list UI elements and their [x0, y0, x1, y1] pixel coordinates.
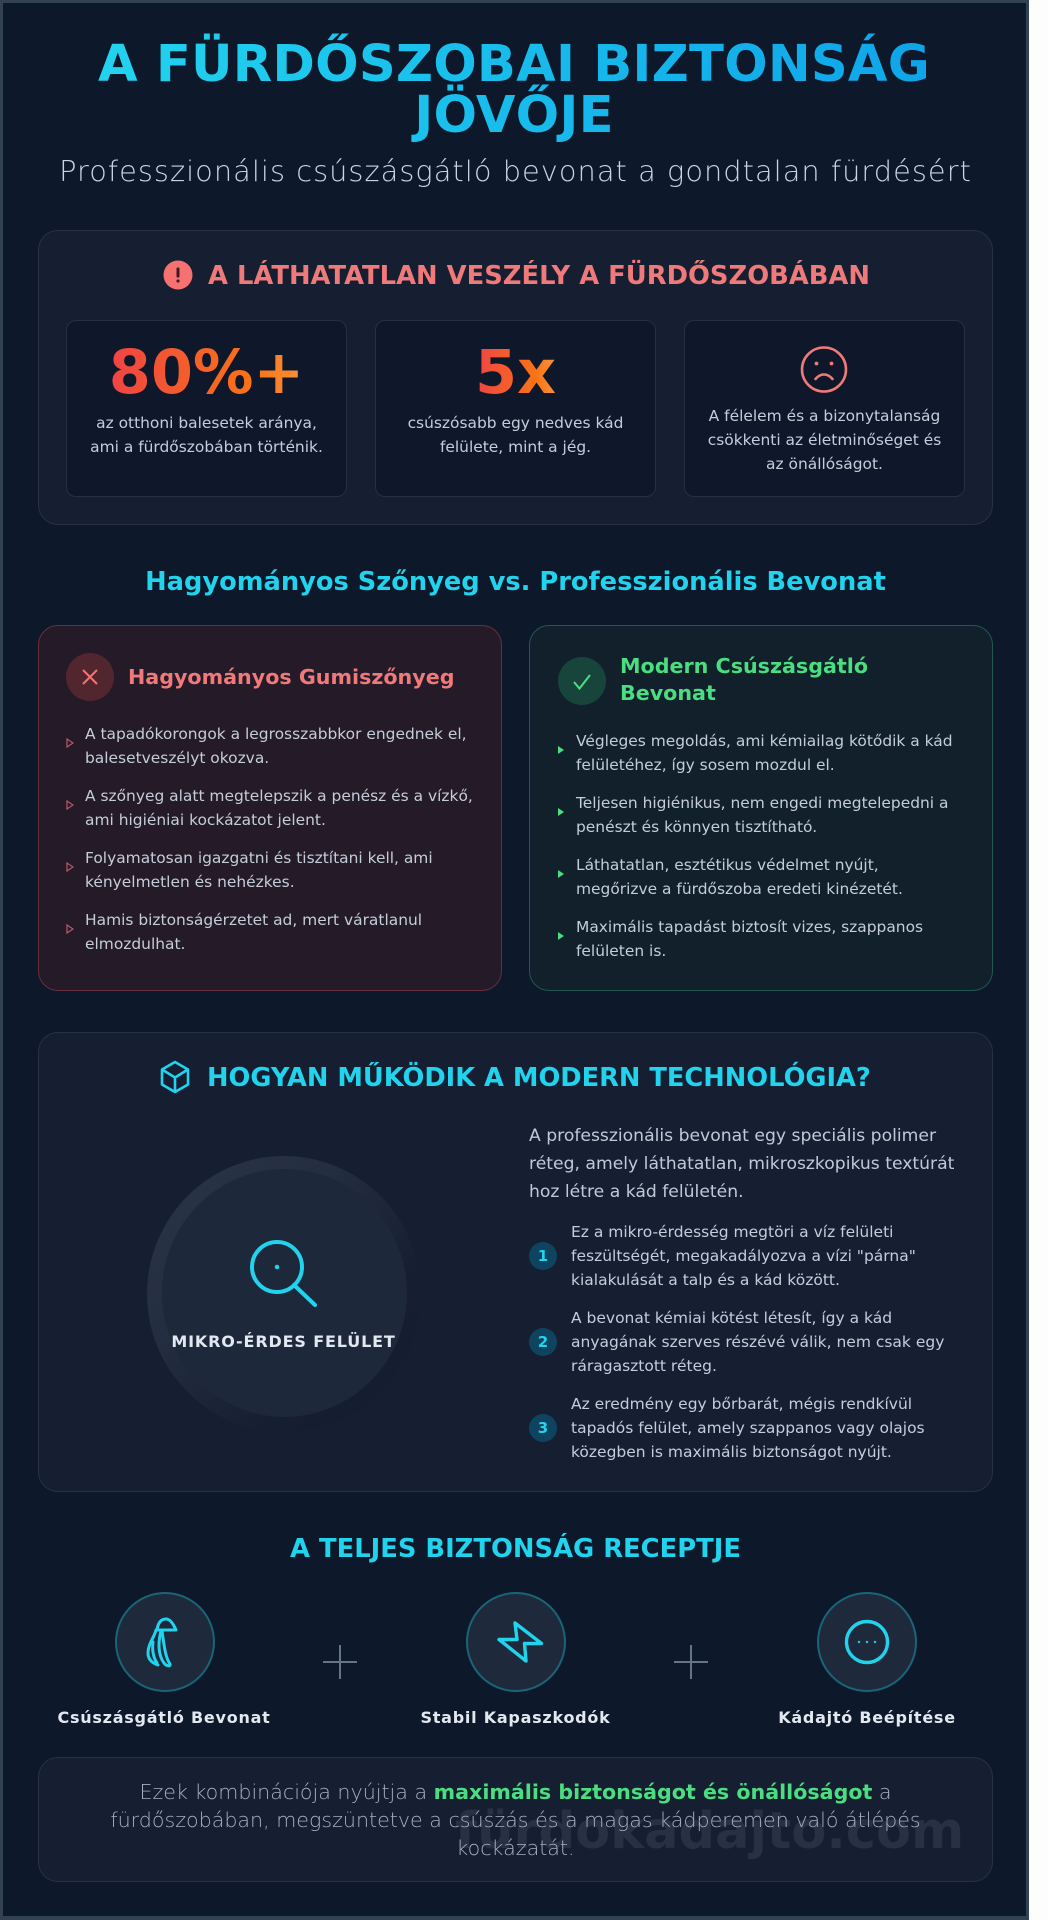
step 2 number: 2: [538, 1333, 548, 1351]
stat 1 text: az otthoni balesetek aránya,: [96, 414, 317, 432]
step 3 number: [529, 1414, 557, 1442]
step 2 text: [571, 1309, 944, 1375]
item 1: Végleges megoldás, ami kémiailag kötődik a kád: [576, 732, 953, 750]
stat 80%: 80%+: [109, 338, 304, 408]
item 4: felületen is.: [576, 942, 666, 960]
watermark: fürdokadajto.com: [455, 1802, 964, 1861]
stat 2 text: felülete, mint a jég.: [440, 438, 591, 456]
title: JÖVŐJE: [414, 85, 614, 145]
icon: circle with dots: [840, 1615, 894, 1669]
intro text: A professzionális bevonat egy speciális polimer: [529, 1126, 936, 1146]
heading: modern coating: [620, 654, 868, 705]
item 2: ami higiéniai kockázatot jelent.: [85, 811, 326, 829]
heading: modern coating: Modern Csúszásgátló: [620, 654, 868, 678]
list: traditional mat: [66, 725, 473, 953]
item 3: megőrizve a fürdőszoba eredeti kinézetét.: [576, 880, 903, 898]
icon: plus: [674, 1645, 708, 1679]
recipe item 2 circle: [466, 1592, 566, 1692]
step 2 number: [529, 1328, 557, 1356]
item 4: [576, 918, 923, 960]
panel: traditional mat: [38, 625, 502, 991]
recipe item 3 circle: [817, 1592, 917, 1692]
bullet 2: [66, 800, 74, 810]
bullet 4: [558, 932, 564, 940]
item 2: [85, 787, 473, 829]
stat 2 text: csúszósabb egy nedves kád: [408, 414, 623, 432]
item 4: Hamis biztonságérzetet ad, mert váratlanul: [85, 911, 422, 929]
step 3 text: közegben is maximális biztonságot nyújt.: [571, 1443, 892, 1461]
bullet 2: [558, 808, 564, 816]
title: [98, 34, 930, 145]
outer ring: [147, 1156, 421, 1432]
conclusion text: Ezek kombinációja nyújtja a maximális biztonságot és önállóságot a: [139, 1780, 892, 1804]
item 2: [576, 794, 948, 836]
step 2 text: anyagának szerves részévé válik, nem csak egy: [571, 1333, 944, 1351]
item 2: A szőnyeg alatt megtelepszik a penész és a vízkő,: [85, 787, 473, 805]
label: tub door: Kádajtó Beépítése: [778, 1708, 956, 1727]
item 3: [576, 856, 903, 898]
bullet 3: [558, 870, 564, 878]
label: MIKRO-ÉRDES FELÜLET: [171, 1332, 396, 1351]
item 4: elmozdulhat.: [85, 935, 185, 953]
item 1: balesetveszélyt okozva.: [85, 749, 269, 767]
heading: modern coating: Bevonat: [620, 681, 716, 705]
step 1 number: [529, 1242, 557, 1270]
heading: traditional mat: Hagyományos Gumiszőnyeg: [128, 665, 454, 689]
heading: comparison: Hagyományos Szőnyeg vs. Professzionális Bevonat: [145, 567, 886, 597]
item 4: Maximális tapadást biztosít vizes, szappanos: [576, 918, 923, 936]
heading: recipe: A TELJES BIZTONSÁG RECEPTJE: [290, 1534, 741, 1564]
subtitle: Professzionális csúszásgátló bevonat a gondtalan fürdésért: [59, 154, 972, 188]
item 3: kényelmetlen és nehézkes.: [85, 873, 295, 891]
stat 3 text: A félelem és a bizonytalanság: [709, 407, 940, 425]
step 3 text: [571, 1395, 925, 1461]
diagram: micro-rough surface: [147, 1156, 407, 1417]
stat 3 text: [708, 407, 941, 473]
intro text: [529, 1126, 954, 1202]
icon: sad face: [800, 346, 848, 393]
item 1: [85, 725, 467, 767]
stat 1 text: [90, 414, 323, 456]
step 1 text: [571, 1223, 916, 1289]
item 3: [85, 849, 433, 891]
panel: modern coating: [529, 625, 993, 991]
icon: check: [558, 657, 606, 705]
intro text: réteg, amely láthatatlan, mikroszkopikus textúrát: [529, 1154, 954, 1174]
heading: danger: A LÁTHATATLAN VESZÉLY A FÜRDŐSZOBÁBAN: [208, 261, 870, 291]
label: grab rails: Stabil Kapaszkodók: [420, 1708, 611, 1727]
item 1: [576, 732, 953, 774]
step 3 number: 3: [538, 1419, 548, 1437]
stat card 1: [66, 320, 347, 497]
item 4: [85, 911, 422, 953]
step 2 text: A bevonat kémiai kötést létesít, így a kád: [571, 1309, 892, 1327]
heading: technology: HOGYAN MŰKÖDIK A MODERN TECHNOLÓGIA?: [207, 1063, 871, 1093]
step 1 text: feszültségét, megakadályozva a vízi "párna": [571, 1247, 916, 1265]
bullet 3: [66, 862, 74, 872]
panel: conclusion: [38, 1757, 993, 1882]
intro text: hoz létre a kád felületén.: [529, 1182, 744, 1202]
icon: jellyfish-like coating: [146, 1618, 178, 1668]
title: A FÜRDŐSZOBAI BIZTONSÁG: [98, 34, 930, 94]
item 2: penészt és könnyen tisztítható.: [576, 818, 817, 836]
step 1 text: kialakulását a talp és a kád között.: [571, 1271, 840, 1289]
conclusion text: [38, 1778, 993, 1862]
stat card 3: [684, 320, 965, 497]
inner disc: [162, 1169, 407, 1417]
conclusion text: kockázatát.: [456, 1836, 575, 1860]
label: coating: Csúszásgátló Bevonat: [57, 1708, 271, 1727]
stat 1 text: ami a fürdőszobában történik.: [90, 438, 323, 456]
bullet 1: [66, 738, 74, 748]
step 1 text: Ez a mikro-érdesség megtöri a víz felületi: [571, 1223, 893, 1241]
stat 5x: 5x: [475, 338, 556, 408]
panel: danger: [38, 230, 993, 525]
icon: plus: [323, 1645, 357, 1679]
recipe item 1 circle: [115, 1592, 215, 1692]
step 2 text: ráragasztott réteg.: [571, 1357, 717, 1375]
icon: warning: [164, 260, 192, 290]
icon: cube: [160, 1060, 190, 1094]
item 3: Folyamatosan igazgatni és tisztítani kell, ami: [85, 849, 433, 867]
item 3: Láthatatlan, esztétikus védelmet nyújt,: [576, 856, 879, 874]
list: modern coating: [558, 732, 953, 960]
icon: bolt handle: [497, 1621, 544, 1663]
bullet 4: [66, 924, 74, 934]
step 3 text: Az eredmény egy bőrbarát, mégis rendkívül: [571, 1395, 912, 1413]
item 1: A tapadókorongok a legrosszabbkor engednek el,: [85, 725, 467, 743]
icon: magnifier: [250, 1240, 318, 1308]
stat 3 text: csökkenti az életminőséget és: [708, 431, 941, 449]
bullet 1: [558, 746, 564, 754]
stat 3 text: az önállóságot.: [766, 455, 883, 473]
item 1: felületéhez, így sosem mozdul el.: [576, 756, 835, 774]
icon: cross: [66, 653, 114, 701]
conclusion text: fürdőszobában, megszüntetve a csúszás és a magas kádperemen való átlépés: [110, 1808, 921, 1832]
stat 2 text: [408, 414, 623, 456]
item 2: Teljesen higiénikus, nem engedi megtelepedni a: [576, 794, 948, 812]
step 3 text: tapadós felület, amely szappanos vagy olajos: [571, 1419, 925, 1437]
stat card 2: [375, 320, 656, 497]
panel: technology: [38, 1032, 993, 1492]
step 1 number: 1: [538, 1247, 548, 1265]
